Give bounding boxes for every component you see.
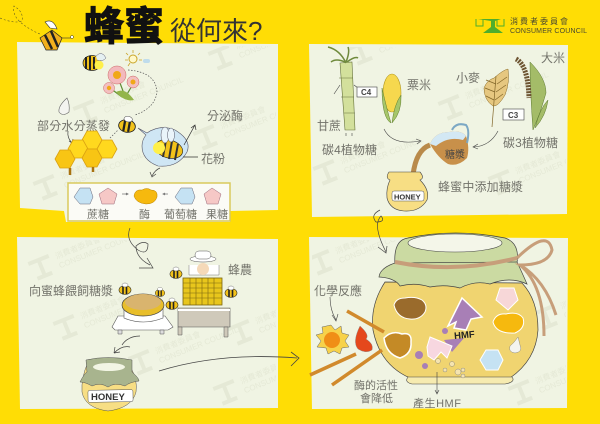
- icon: flying bee: [118, 115, 137, 134]
- icon: jug pouring syrup: [413, 124, 468, 175]
- icons: bubbles: [436, 358, 465, 378]
- arrow: [435, 372, 439, 394]
- panel: feeding bees: [17, 228, 300, 412]
- title: [84, 5, 262, 49]
- icon: enzyme: [134, 188, 157, 204]
- label: C3: C3: [508, 111, 519, 120]
- watermarks: [313, 47, 566, 196]
- icon: title bee: [0, 6, 74, 50]
- logo: Consumer Council: CONSUMER COUNCIL: [510, 28, 587, 35]
- label: chemical reaction: 化學反應: [314, 283, 362, 298]
- label: syrup added: 蜂蜜中添加糖漿: [438, 179, 523, 194]
- logo: Consumer Council: [476, 16, 587, 35]
- icon: glucose right: [480, 350, 503, 370]
- label: C3: [503, 109, 524, 120]
- label: cane: 甘蔗: [317, 119, 341, 133]
- logo: Consumer Council: 消費者委員會: [510, 16, 568, 26]
- icon: sugar cane: [328, 47, 358, 136]
- icons: sticks: [310, 311, 384, 385]
- icon: honey jar: [80, 358, 139, 411]
- icon: rice: [516, 59, 548, 130]
- panel: syrup from plants: [309, 44, 568, 217]
- icon: bee with flower: [83, 50, 150, 100]
- sugar labels: 蔗糖: [87, 207, 109, 221]
- label: C3 sugar: 碳3植物糖: [503, 135, 558, 150]
- icon: jug pouring syrup: 糖漿: [445, 148, 465, 161]
- arrows: [384, 129, 498, 149]
- label: C4: C4: [361, 88, 372, 97]
- icon: enzyme right: [493, 313, 524, 333]
- arrow: [330, 297, 338, 321]
- arrow from top: [374, 210, 387, 253]
- watermarks: [33, 46, 276, 200]
- flight path: [110, 70, 157, 138]
- arrow: [150, 168, 160, 177]
- arrow: [114, 336, 140, 353]
- label: produces HMF: 產生HMF: [413, 396, 461, 410]
- icon: bee in bubble: [138, 125, 198, 166]
- icon: corn: [382, 74, 401, 123]
- icon: flame: [355, 326, 372, 352]
- icon: honey jar: HONEY: [394, 192, 421, 202]
- watermarks: [312, 240, 566, 406]
- icon: wheat: [484, 69, 509, 127]
- label: evaporation: 部分水分蒸發: [37, 118, 110, 133]
- sugar diagram box: [68, 183, 230, 221]
- label: rice: 大米: [541, 51, 565, 65]
- icon: sucrose: [74, 188, 93, 204]
- arrow: [68, 131, 73, 143]
- icon: hive feeder: [112, 294, 173, 334]
- icon: honey jar: HONEY: [91, 392, 125, 403]
- icon: large jar: [372, 233, 556, 384]
- title: 蜂蜜: [84, 5, 164, 49]
- icon: brown enzyme: [394, 297, 426, 319]
- label: pollen: 花粉: [201, 151, 225, 166]
- label: secretion enzyme: 分泌酶: [207, 108, 243, 123]
- icon: fructose right: [496, 288, 518, 310]
- arrow: [129, 228, 153, 268]
- icon: beekeeper with frame: [178, 251, 230, 337]
- icon: fructose: [204, 188, 221, 204]
- icon: glucose: [175, 188, 195, 204]
- panel: HMF jar: [309, 210, 568, 409]
- icon: HMF arrow: HMF: [454, 329, 475, 342]
- label: enzyme activity: 酶的活性: [354, 378, 398, 392]
- label: feed bees: 向蜜蜂餵飼糖漿: [29, 283, 113, 298]
- icon: HMF arrow: [444, 298, 482, 352]
- icons: purple bits: [415, 328, 448, 369]
- icon: browned enzyme: [384, 333, 411, 358]
- label: C4 sugar: 碳4植物糖: [322, 142, 377, 157]
- sugar diagram box: 葡萄糖: [164, 207, 197, 221]
- icon: sun: [316, 325, 349, 354]
- label: C4: [357, 87, 377, 97]
- arrow: [159, 352, 299, 371]
- label: lowered: 會降低: [360, 391, 393, 405]
- watermarks: [28, 240, 276, 406]
- sugar diagram box: 果糖: [206, 207, 228, 221]
- title: 從何來?: [170, 16, 262, 46]
- icon: fructose molecule: [427, 337, 452, 360]
- icon: drop right: [510, 337, 521, 353]
- icons: bees: [119, 267, 237, 310]
- label: corn: 粟米: [407, 78, 431, 92]
- arrows: [122, 193, 168, 195]
- sugar diagram box: 酶: [139, 208, 150, 221]
- label: wheat: 小麥: [456, 71, 480, 85]
- icon: water drop: [59, 98, 69, 114]
- panel: nectar to honey: [17, 42, 278, 222]
- table: [178, 308, 230, 327]
- label: beekeeper: 蜂農: [228, 263, 252, 277]
- icon: honeycomb: [55, 131, 117, 175]
- icon: honey jar: [387, 172, 428, 211]
